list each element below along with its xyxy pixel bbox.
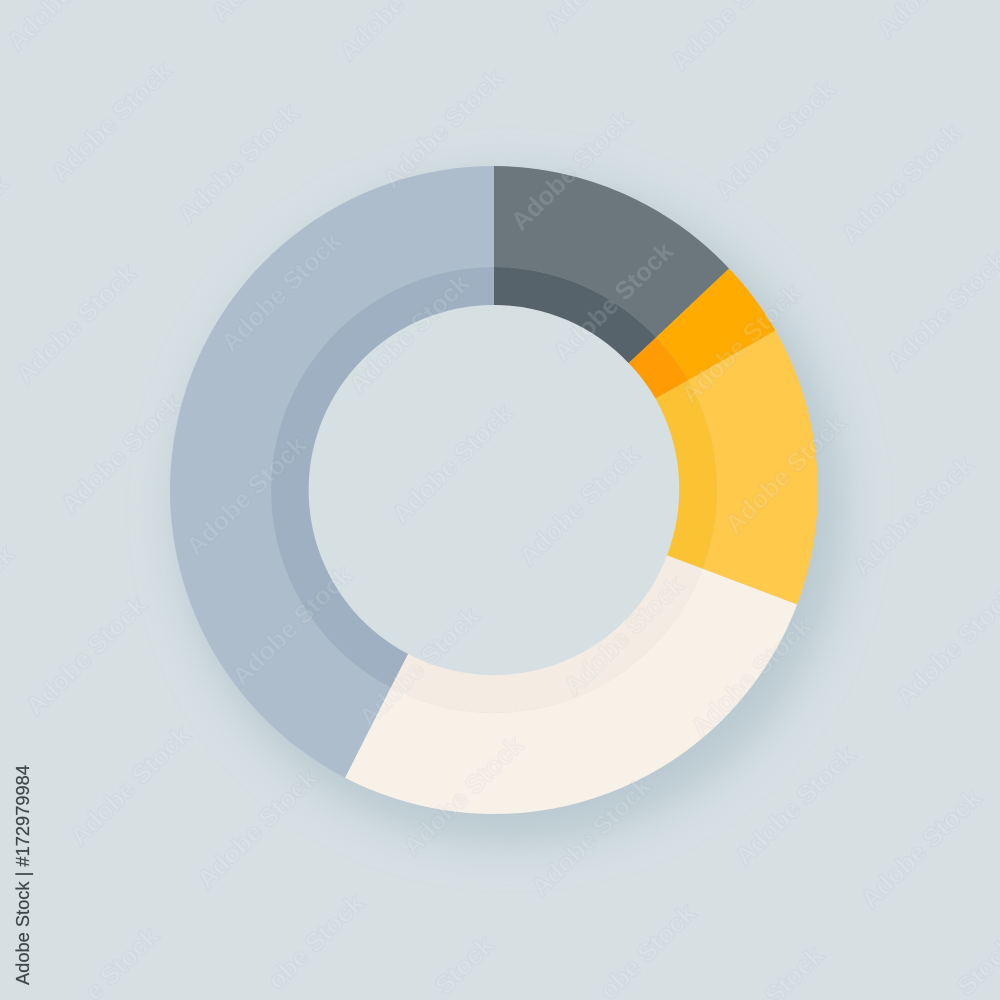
watermark pattern: Adobe Stock [676,279,807,409]
segment: orange [629,268,776,398]
watermark pattern: Adobe Stock [720,409,851,539]
segment: blue grey [170,166,494,778]
watermark pattern: Adobe Stock [506,106,637,236]
segment: yellow [656,330,818,604]
watermark pattern: Adobe Stock [192,764,323,894]
watermark pattern: Adobe Stock [836,119,967,249]
watermark pattern: obe Stock [263,889,370,995]
watermark pattern: Adobe Stock [710,75,841,205]
watermark pattern: Adobe Stock [227,561,358,691]
watermark pattern: Adobe Stock [11,259,142,389]
watermark pattern: Adobe Stock [514,441,645,571]
segment: dark grey [494,166,729,363]
donut drop shadow [176,176,844,844]
watermark pattern: Adobe Stock [856,784,987,914]
watermark pattern: Adobe Stock [173,99,304,229]
watermark pattern: Adobe Stock [344,269,475,399]
donut centre hole [307,303,681,677]
watermark pattern: Adobe Stock [686,612,817,742]
watermark pattern: Adobe Stock [387,399,518,529]
watermark pattern: Adobe Stock [46,57,177,187]
stock id label: Adobe Stock | #172979984 [12,765,33,985]
watermark pattern: Adobe Stock [848,451,979,581]
watermark pattern: Adobe Stock [378,64,509,194]
watermark pattern: Adobe Stock [559,571,690,701]
watermark pattern: Adobe Stock [398,731,529,861]
segment: cream [345,555,797,814]
donut chart [170,166,818,814]
watermark pattern: Stock [430,931,500,1000]
watermark pattern: Adobe Stock [730,741,861,871]
watermark pattern: Adobe Stock [181,431,312,561]
watermark pattern: Adobe Stock [56,389,187,519]
watermark pattern: Adobe Stock [526,772,657,902]
watermark pattern: Adobe Stock [548,237,679,367]
watermark pattern: Adobe Stock [354,602,485,732]
watermark pattern: Adobe Stock [21,591,152,721]
watermark pattern: Adobe Stock [65,721,196,851]
watermark pattern: Adobe Stock [216,227,347,357]
